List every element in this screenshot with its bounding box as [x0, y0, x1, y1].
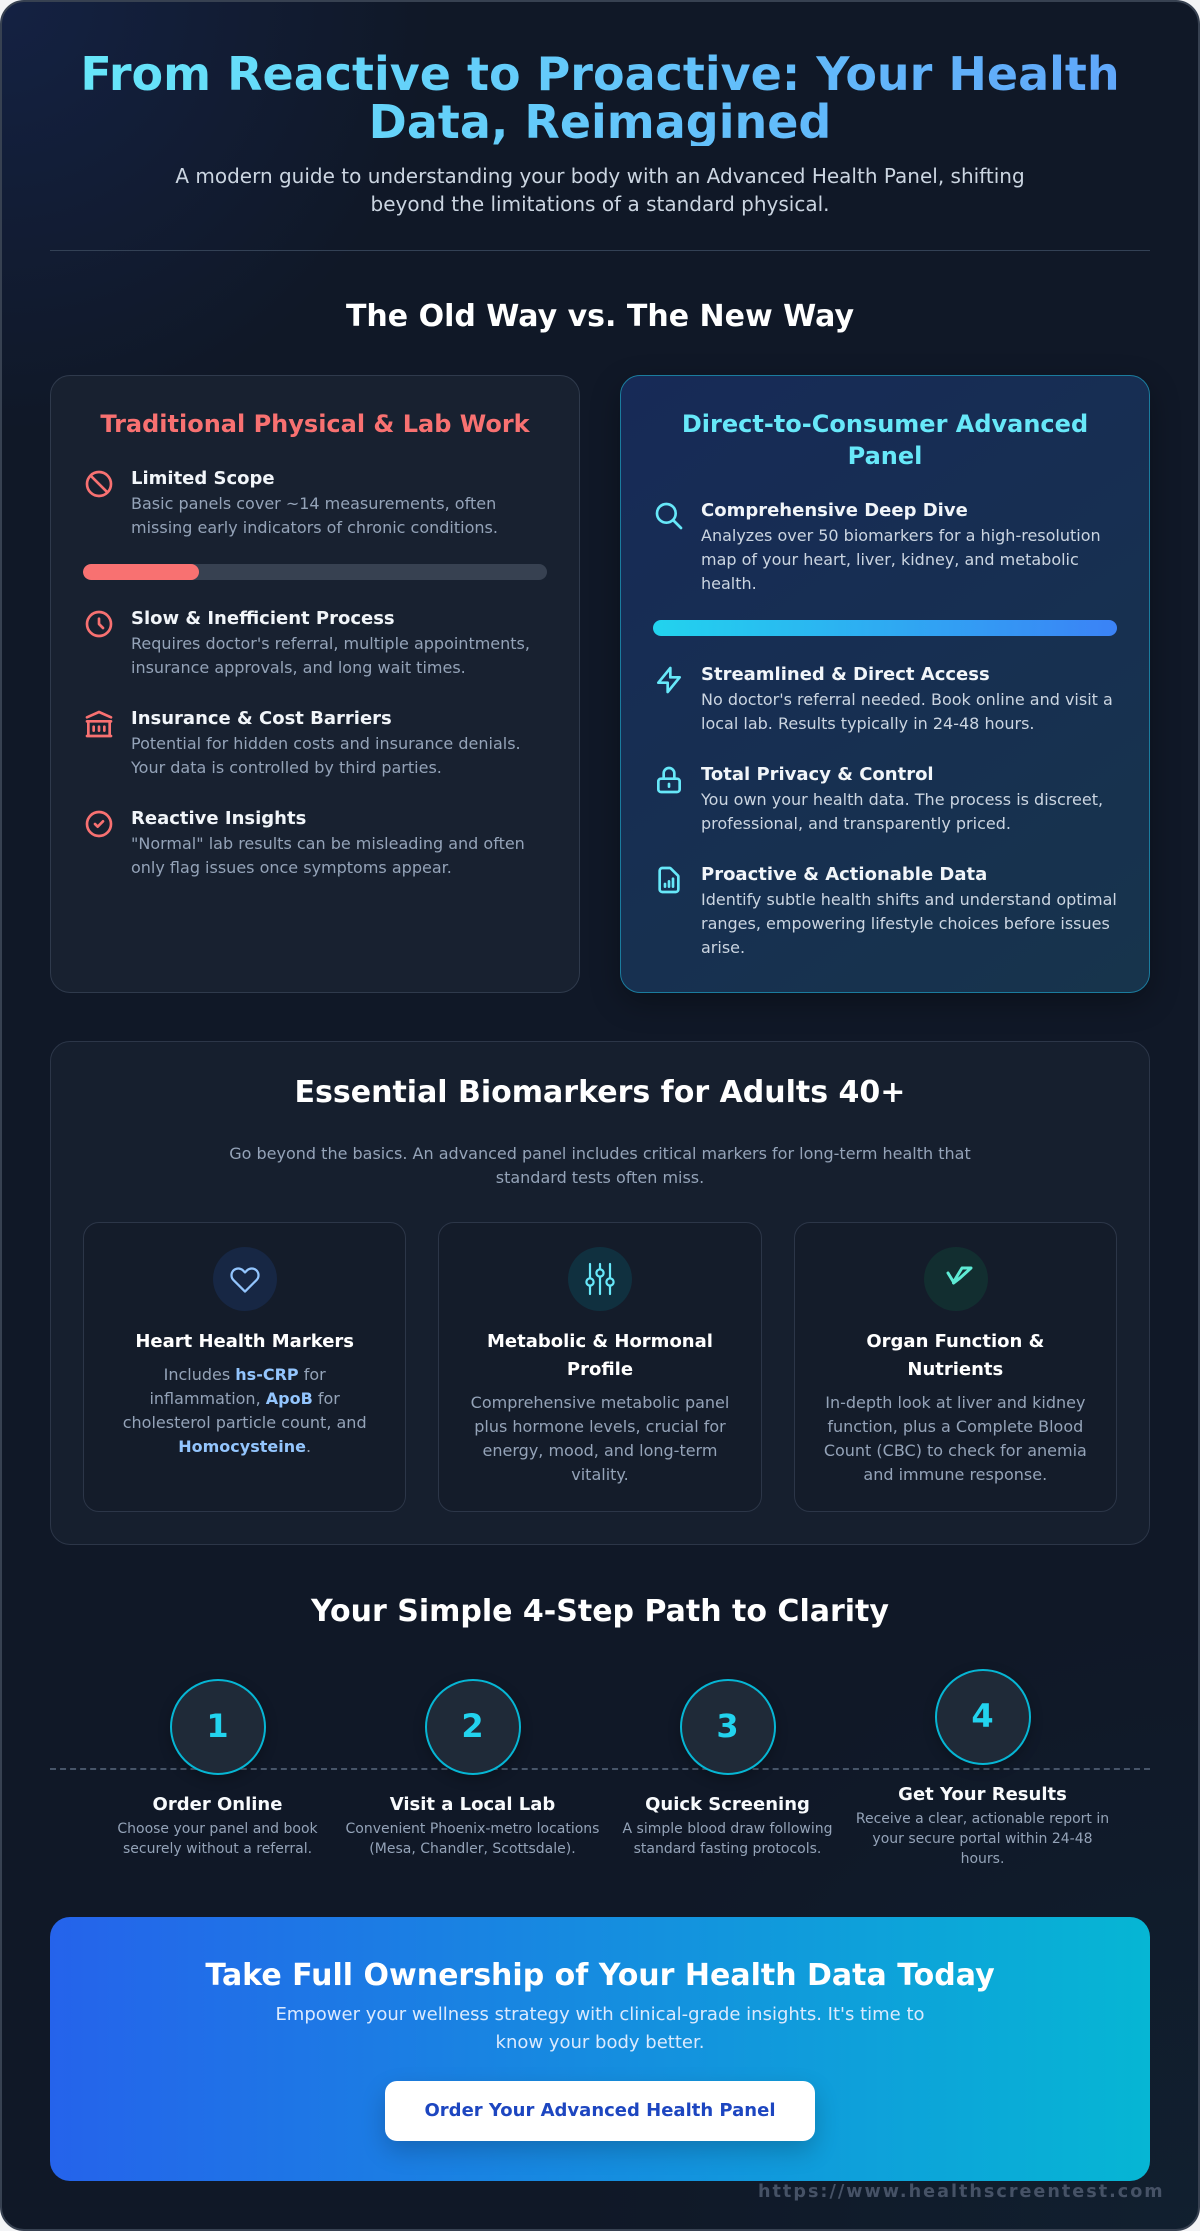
- card text: Comprehensive metabolic panel: [471, 1393, 729, 1412]
- subtitle: beyond the limitations of a standard physical.: [370, 192, 829, 216]
- step text: [598, 1819, 858, 1859]
- item text: Potential for hidden costs and insurance denials.: [131, 734, 521, 753]
- progress bar: 25%: [83, 564, 547, 580]
- step text: your secure portal within 24-48: [872, 1831, 1093, 1847]
- item: actionable data: [658, 864, 1117, 957]
- card text: inflammation, ApoB for: [149, 1389, 340, 1408]
- step 1: [117, 1679, 318, 1857]
- item: limited scope: [86, 468, 498, 537]
- item text: [701, 526, 1101, 593]
- item text: insurance approvals, and long wait times.: [131, 658, 466, 677]
- step text: (Mesa, Chandler, Scottsdale).: [369, 1841, 576, 1857]
- card text: Homocysteine.: [178, 1437, 311, 1456]
- item heading: Total Privacy & Control: [701, 764, 934, 785]
- panel heading: Traditional Physical & Lab Work: [100, 410, 530, 438]
- step heading: Quick Screening: [645, 1794, 810, 1815]
- step number: 1: [206, 1707, 229, 1745]
- card text: plus hormone levels, crucial for: [474, 1417, 726, 1436]
- subtitle: A modern guide to understanding your body with an Advanced Health Panel, shifting: [175, 164, 1025, 188]
- icon: lightning: [656, 666, 682, 694]
- icon: check: [924, 1247, 988, 1311]
- title: [50, 50, 1150, 146]
- item text: [701, 790, 1103, 833]
- card text: [123, 1365, 367, 1456]
- item text: [131, 734, 521, 777]
- icon: bank: [86, 710, 112, 738]
- panel: direct-to-consumer: [620, 375, 1150, 993]
- panel: essential biomarkers: [50, 1041, 1150, 1545]
- item: reactive insights: [86, 808, 525, 877]
- item text: [131, 494, 498, 537]
- icon: sliders: [568, 1247, 632, 1311]
- item text: No doctor's referral needed. Book online and visit a: [701, 690, 1113, 709]
- card text: In-depth look at liver and kidney: [825, 1393, 1085, 1412]
- biomarkers intro text: Go beyond the basics. An advanced panel includes critical markers for long-term health that: [229, 1144, 971, 1163]
- step number: [680, 1679, 776, 1775]
- item heading: Streamlined & Direct Access: [701, 664, 990, 685]
- icon: heart: [213, 1247, 277, 1311]
- step number: 2: [461, 1707, 484, 1745]
- step text: securely without a referral.: [123, 1841, 312, 1857]
- card text: function, plus a Complete Blood: [827, 1417, 1083, 1436]
- card heading: Metabolic & Hormonal: [487, 1331, 713, 1352]
- item text: health.: [701, 574, 757, 593]
- subtitle: [175, 164, 1025, 216]
- step 3: [622, 1679, 832, 1857]
- item text: Identify subtle health shifts and understand optimal: [701, 890, 1117, 909]
- heading: steps: Your Simple 4-Step Path to Clarity: [311, 1594, 889, 1629]
- item text: Your data is controlled by third parties.: [131, 758, 442, 777]
- card heading: Organ Function &: [866, 1331, 1044, 1352]
- card text: cholesterol particle count, and: [123, 1413, 367, 1432]
- heading: comparison: The Old Way vs. The New Way: [346, 299, 854, 334]
- biomarker card: organ function: [794, 1222, 1117, 1512]
- panel heading: [682, 410, 1088, 470]
- item heading: Slow & Inefficient Process: [131, 608, 395, 629]
- item heading: Insurance & Cost Barriers: [131, 708, 392, 729]
- item text: professional, and transparently priced.: [701, 814, 1011, 833]
- item text: Requires doctor's referral, multiple appointments,: [131, 634, 530, 653]
- step text: A simple blood draw following: [622, 1821, 832, 1837]
- item text: ranges, empowering lifestyle choices before issues: [701, 914, 1110, 933]
- title: From Reactive to Proactive: Your Health: [80, 47, 1120, 101]
- item text: missing early indicators of chronic conditions.: [131, 518, 498, 537]
- step text: [346, 1821, 599, 1857]
- item: insurance barriers: [86, 708, 521, 777]
- icon: lock: [657, 766, 681, 794]
- item text: [701, 690, 1113, 733]
- item text: arise.: [701, 938, 745, 957]
- step number: [934, 1669, 1030, 1765]
- card heading: Profile: [567, 1359, 633, 1380]
- biomarkers intro text: [229, 1144, 971, 1187]
- step text: Receive a clear, actionable report in: [856, 1811, 1109, 1827]
- step heading: Visit a Local Lab: [390, 1794, 555, 1815]
- cta button: Order Your Advanced Health Panel: [424, 2100, 775, 2121]
- step number: 4: [971, 1697, 994, 1735]
- step number: [424, 1679, 520, 1775]
- step heading: Order Online: [153, 1794, 282, 1815]
- card text: energy, mood, and long-term: [483, 1441, 717, 1460]
- icon: search: [656, 502, 682, 530]
- item heading: Comprehensive Deep Dive: [701, 500, 968, 521]
- item text: "Normal" lab results can be misleading and often: [131, 834, 525, 853]
- biomarker card: heart: [83, 1222, 406, 1512]
- cta text: know your body better.: [496, 2032, 704, 2053]
- cta text: Empower your wellness strategy with clinical-grade insights. It's time to: [275, 2004, 925, 2025]
- step heading: Get Your Results: [898, 1784, 1067, 1805]
- step number: [170, 1679, 266, 1775]
- item text: [131, 634, 530, 677]
- step text: hours.: [961, 1851, 1004, 1867]
- item text: map of your heart, liver, kidney, and metabolic: [701, 550, 1079, 569]
- step text: [852, 1809, 1112, 1869]
- panel heading: Panel: [848, 442, 922, 470]
- step text: standard fasting protocols.: [634, 1841, 821, 1857]
- icon: clock: [86, 610, 112, 638]
- panel: traditional physical: [50, 375, 580, 993]
- item text: only flag issues once symptoms appear.: [131, 858, 452, 877]
- card text: Includes hs-CRP for: [164, 1365, 326, 1384]
- progress bar: full: [653, 620, 1117, 636]
- card heading: Nutrients: [907, 1359, 1003, 1380]
- step text: [117, 1821, 318, 1857]
- card heading: Heart Health Markers: [135, 1331, 354, 1352]
- icon: report: [658, 866, 680, 894]
- card heading: [487, 1331, 713, 1380]
- panel heading: Direct-to-Consumer Advanced: [682, 410, 1088, 438]
- item: deep dive: [656, 500, 1101, 593]
- heading: biomarkers: Essential Biomarkers for Adults 40+: [295, 1075, 905, 1110]
- item: slow process: [86, 608, 530, 677]
- call to action panel: [50, 1917, 1150, 2181]
- biomarkers intro text: standard tests often miss.: [496, 1168, 704, 1187]
- item heading: Limited Scope: [131, 468, 275, 489]
- card text: and immune response.: [863, 1465, 1047, 1484]
- cta text: [50, 2001, 1150, 2057]
- cta button: [385, 2081, 815, 2141]
- card text: vitality.: [571, 1465, 629, 1484]
- card text: [471, 1393, 729, 1484]
- item heading: Proactive & Actionable Data: [701, 864, 987, 885]
- item text: Basic panels cover ~14 measurements, often: [131, 494, 496, 513]
- step text: Convenient Phoenix-metro locations: [346, 1821, 599, 1837]
- step text: Choose your panel and book: [117, 1821, 318, 1837]
- cta heading: Take Full Ownership of Your Health Data Today: [205, 1958, 995, 1993]
- item heading: Reactive Insights: [131, 808, 306, 829]
- icon: ban: [86, 470, 112, 498]
- item: privacy: [657, 764, 1103, 833]
- card text: Count (CBC) to check for anemia: [824, 1441, 1087, 1460]
- card heading: [866, 1331, 1044, 1380]
- website watermark: https://www.healthscreentest.com: [758, 2182, 1165, 2202]
- item text: You own your health data. The process is discreet,: [701, 790, 1103, 809]
- step number: 3: [716, 1707, 739, 1745]
- item text: [701, 890, 1117, 957]
- step 4: [852, 1669, 1112, 1869]
- title: Data, Reimagined: [369, 95, 831, 149]
- item: direct access: [656, 664, 1113, 733]
- biomarker card: metabolic: [438, 1222, 762, 1512]
- item text: [131, 834, 525, 877]
- step 2: [346, 1679, 599, 1857]
- item text: local lab. Results typically in 24-48 hours.: [701, 714, 1035, 733]
- item text: Analyzes over 50 biomarkers for a high-resolution: [701, 526, 1101, 545]
- icon: check circle: [86, 810, 112, 838]
- card text: [824, 1393, 1087, 1484]
